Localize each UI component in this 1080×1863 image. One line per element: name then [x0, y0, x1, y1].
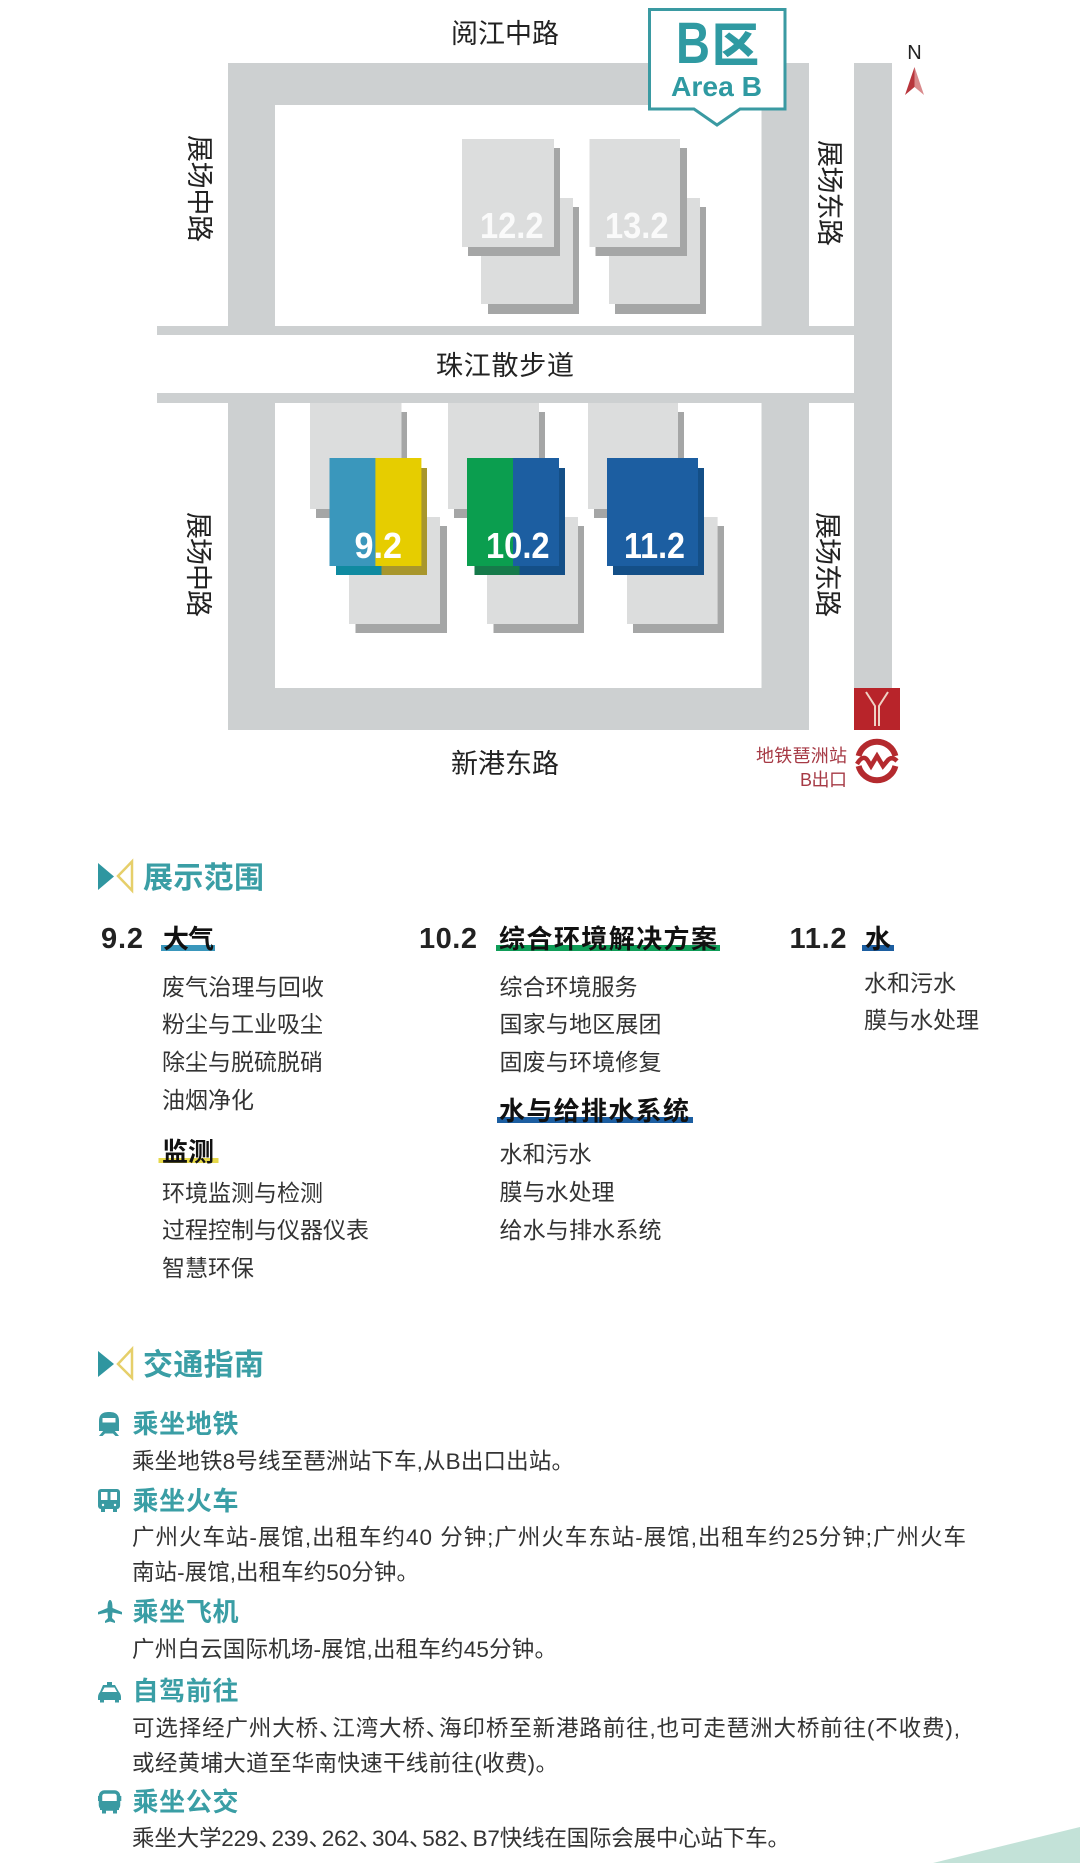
hall 13.2: 13.2 — [605, 205, 668, 246]
column: 10.2: 国家与地区展团 — [500, 1011, 662, 1037]
column: 11.2: 11.2 — [790, 923, 846, 955]
column: 9.2: 油烟净化 — [162, 1087, 254, 1113]
column: 11.2: 膜与水处理 — [864, 1007, 979, 1033]
subheading: train: 乘坐火车 — [132, 1486, 238, 1516]
road label: west upper: 展场中路 — [184, 135, 214, 242]
icon: metro exit Y — [854, 688, 900, 730]
corner decoration — [933, 1827, 1080, 1863]
hall 12.2: 12.2 — [480, 205, 544, 246]
column: 9.2: 智慧环保 — [162, 1255, 254, 1281]
column: 10.2: 水与给排水系统 — [499, 1096, 689, 1126]
metro station label: 地铁琶洲站 — [756, 746, 847, 766]
column: 10.2: 10.2 — [419, 923, 477, 955]
hall 12.2 — [462, 139, 579, 314]
hall 10.2: 10.2 — [486, 525, 550, 566]
category underline: integrated solutions — [496, 945, 720, 951]
icon: bus — [98, 1792, 121, 1814]
column: 9.2: 过程控制与仪器仪表 — [162, 1217, 369, 1243]
callout: Area B: 区 — [712, 19, 759, 72]
text: self-drive: 可选择经广州大桥、江湾大桥、海印桥至新港路前往,也可走琶洲大桥前往(不收费), — [132, 1716, 960, 1741]
text: metro: 乘坐地铁8号线至琶洲站下车,从B出口出站。 — [132, 1449, 574, 1474]
icon: plane — [98, 1600, 122, 1623]
heading: 交通指南 — [143, 1349, 264, 1382]
column: 9.2: 监测 — [162, 1137, 214, 1167]
callout: Area B: Area B — [671, 71, 762, 102]
heading icon — [98, 862, 132, 890]
column: 9.2: 环境监测与检测 — [162, 1180, 323, 1206]
road label: west lower: 展场中路 — [183, 512, 213, 617]
subheading: self-drive: 自驾前往 — [132, 1676, 238, 1706]
text: self-drive: 或经黄埔大道至华南快速干线前往(收费)。 — [132, 1751, 558, 1776]
column: 10.2: 综合环境服务 — [500, 974, 638, 1000]
subheading: plane: 乘坐飞机 — [132, 1597, 238, 1627]
road label: east lower: 展场东路 — [812, 512, 842, 617]
hall 10.2 — [467, 458, 565, 575]
subheading: metro: 乘坐地铁 — [132, 1409, 238, 1439]
road network — [157, 63, 892, 730]
unlabelled grey halls behind row — [310, 403, 724, 633]
road label: promenade: 珠江散步道 — [436, 351, 574, 381]
text: train — [132, 1525, 966, 1585]
hall 11.2: 11.2 — [624, 525, 685, 566]
category underline: air — [161, 945, 215, 951]
heading icon — [98, 1349, 132, 1378]
road label: north: 阅江中路 — [451, 19, 559, 49]
text: train: 南站-展馆,出租车约50分钟。 — [132, 1560, 419, 1585]
section: transport guide — [98, 1349, 966, 1851]
hall 11.2 — [607, 458, 704, 575]
metro station label: B出口 — [800, 770, 847, 790]
callout: Area B: B — [676, 11, 710, 76]
category underline: water — [862, 945, 894, 951]
metro station label — [756, 746, 847, 790]
column: 11.2: 水 — [865, 924, 891, 954]
category underline: water systems — [497, 1117, 693, 1123]
road label: south: 新港东路 — [451, 749, 559, 779]
column: 9.2: 大气 — [163, 924, 214, 954]
column: 10.2 — [419, 923, 720, 1243]
text: bus: 乘坐大学229、239、262、304、582、B7快线在国际会展中心站下车。 — [132, 1826, 790, 1851]
category underline: monitoring — [158, 1158, 218, 1163]
column: 9.2: 除尘与脱硫脱硝 — [162, 1049, 323, 1075]
hall 9.2: 9.2 — [354, 525, 402, 566]
text: self-drive — [132, 1716, 960, 1776]
column: 9.2: 粉尘与工业吸尘 — [162, 1011, 323, 1037]
hall 9.2 — [330, 458, 427, 575]
icon: Shanghai metro style logo — [857, 742, 897, 780]
section: exhibit scope — [98, 862, 979, 1281]
heading: 展示范围 — [143, 862, 264, 895]
callout: Area B — [650, 10, 785, 125]
column: 10.2: 综合环境解决方案 — [499, 924, 717, 954]
hall 13.2 — [590, 139, 706, 314]
column: 11.2 — [790, 923, 979, 1033]
column: 11.2: 水和污水 — [864, 970, 956, 996]
column: 10.2: 水和污水 — [500, 1141, 592, 1167]
road label: east upper: 展场东路 — [814, 140, 844, 246]
venue map — [157, 10, 924, 790]
compass north arrow — [905, 42, 924, 95]
compass north arrow: N — [907, 42, 922, 64]
column: 9.2: 废气治理与回收 — [162, 974, 324, 1000]
column: 9.2 — [101, 923, 369, 1281]
column: 9.2: 9.2 — [101, 923, 143, 955]
column: 10.2: 固废与环境修复 — [500, 1049, 662, 1075]
column: 10.2: 膜与水处理 — [500, 1179, 614, 1205]
icon: train — [98, 1489, 120, 1512]
text: plane: 广州白云国际机场-展馆,出租车约45分钟。 — [132, 1637, 557, 1662]
column: 10.2: 给水与排水系统 — [500, 1217, 662, 1243]
icon: metro — [99, 1412, 119, 1436]
subheading: bus: 乘坐公交 — [132, 1787, 238, 1817]
icon: car — [98, 1682, 121, 1702]
text: train: 广州火车站-展馆,出租车约40 分钟;广州火车东站-展馆,出租车约25分钟;广州火车 — [132, 1525, 966, 1550]
